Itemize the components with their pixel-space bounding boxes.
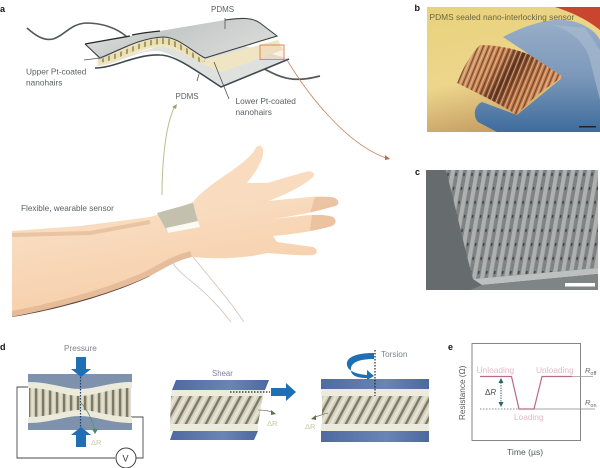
R on line [480,408,534,410]
cream layers [28,382,132,396]
delta R label: ΔR [91,438,102,447]
delta R arrow [81,403,95,431]
top arrow [71,357,91,377]
panel label e: e [448,342,453,352]
orange arrow [287,60,389,159]
panel: e resistance chart [448,342,597,457]
cream layer top [321,389,429,396]
axis x label: Time (µs) [507,447,543,457]
panel: a sensor schematic [0,4,390,195]
micrograph background [426,170,598,290]
label R off: off [590,371,597,377]
panel label c: c [415,167,420,177]
green arrow [162,106,175,195]
lower PDMS sheet [95,46,289,86]
scale bar [579,126,596,128]
right arrow [271,383,296,401]
label R on: on [590,403,597,409]
delta R label: ΔR [267,419,278,428]
torsion diagram [305,350,429,442]
arm and hand [12,146,338,317]
bottom blue layer [321,431,429,442]
red inset box [260,45,284,60]
label PDMS top: PDMS [211,5,234,14]
dotted axis [80,377,82,427]
signal trace [480,376,572,409]
upper PDMS sheet [85,18,277,60]
sensor wires [173,233,244,322]
dotted axis [374,350,376,396]
bottom blue layer [170,431,258,440]
panel label b: b [414,3,420,13]
label upper nanohairs: nanohairs [26,78,62,88]
shear diagram [170,369,296,440]
voltmeter [116,448,136,468]
label lower nanohairs: Lower Pt-coated [236,96,296,106]
delta R arrow [258,410,274,413]
label unloading left: Unloading [476,365,515,375]
delta R double arrow [500,380,502,405]
cream layer bottom [170,424,258,431]
pressure diagram: V [122,454,129,464]
label PDMS bottom: PDMS [176,92,199,101]
glove [475,20,600,132]
panel: arm with wearable sensor [12,146,340,322]
copper sensor sheet [457,45,563,115]
cream layer top [171,390,265,396]
label torsion: Torsion [381,350,408,359]
dotted axis [230,391,270,393]
label pressure: Pressure [64,344,97,353]
label photo caption: PDMS sealed nano-interlocking sensor [430,12,574,22]
leader lines [84,18,229,99]
top blue layer [172,380,269,390]
top blue layer [321,379,429,389]
bottom arrow [71,427,91,447]
label R off: R [585,366,590,375]
panel: b photo [414,3,600,132]
cream layer bottom [321,424,429,431]
wrist sensor patch [157,203,199,233]
top blue layer [28,374,132,394]
R off line [543,376,593,378]
panel label d: d [0,342,6,352]
rotation arrow [347,353,374,380]
right wire [256,65,320,79]
panel label a: a [0,4,6,14]
label upper nanohairs: Upper Pt-coated [26,66,86,76]
nanohair layers [98,34,283,72]
label R on: R [585,398,590,407]
nanohairs [29,388,131,417]
pressure diagram [17,344,143,468]
photo background [427,7,600,132]
nanohairs [322,396,429,424]
axis y label: Resistance (Ω) [458,365,467,420]
left wire [27,23,127,39]
label shear: Shear [212,369,233,378]
label loading: Loading [514,412,544,422]
scale bar [565,283,595,286]
nanohair field [446,170,598,279]
bottom blue layer [28,414,132,430]
delta R label: ΔR [305,422,316,431]
label unloading right: Unloading [536,365,574,375]
chart frame [472,344,580,440]
nanohairs [170,396,263,424]
delta R arrow [313,413,328,418]
delta R label: ΔR [485,388,496,397]
arm shading [12,197,340,318]
label flexible sensor: Flexible, wearable sensor [21,204,114,213]
panel: c micrograph [415,167,598,290]
circuit wire [17,387,143,458]
label lower nanohairs: nanohairs [236,107,272,117]
panel: d mechanics [0,342,429,468]
